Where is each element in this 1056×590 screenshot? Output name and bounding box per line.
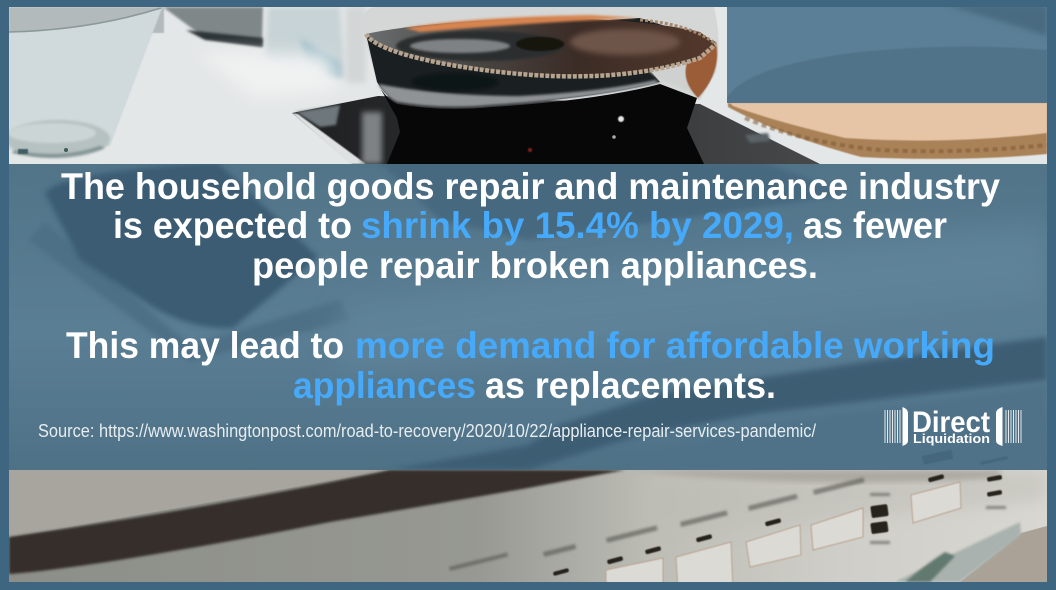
heading: demand implication: [66, 325, 995, 406]
blurred tablet shadow: [377, 160, 850, 240]
dishwasher blurred labels: [449, 477, 1006, 571]
cork coaster: [728, 103, 1047, 159]
clear glass top: [361, 7, 719, 100]
background dark object: [163, 7, 263, 47]
heading: shrink statistic: [61, 166, 1000, 286]
heading: shrink statistic: as fewer: [803, 205, 947, 246]
light glass wedge: [648, 70, 660, 82]
heading: demand implication: This may lead to: [66, 325, 344, 366]
photo: dishwasher control panel: [9, 470, 1047, 590]
metal trim: [960, 526, 1047, 582]
left drinking glass: [6, 7, 164, 158]
carafe: [361, 7, 719, 164]
heading: shrink statistic: is expected to: [113, 205, 352, 246]
tablet: [292, 96, 820, 164]
heading: demand implication: appliances: [293, 365, 476, 406]
photo: coffee carafe on tablet: [6, 7, 1047, 164]
heading: shrink statistic: people repair broken appliances.: [252, 245, 818, 286]
light band of glass: [378, 80, 660, 107]
heading: shrink statistic: shrink by 15.4% by 2029,: [361, 205, 794, 246]
brown side: [686, 42, 717, 98]
dark liquid under froth: [366, 18, 716, 107]
dishwasher indicator lights: [553, 474, 1002, 576]
source citation: Source: https://www.washingtonpost.com/road-to-recovery/2020/10/22/appliance-repair-services-pandemic/: [38, 421, 816, 441]
dark stripe: [9, 470, 625, 574]
heading: shrink statistic: The household goods repair and maintenance industry: [61, 166, 1000, 207]
heading: demand implication: more demand for affordable working: [355, 325, 995, 366]
upper-right translucent blue panel: [727, 5, 1047, 103]
black base: [378, 84, 704, 164]
blurred phone shadow: [34, 230, 342, 360]
dishwasher buttons: [606, 482, 961, 590]
logo: Direct Liquidation: Liquidation: [913, 432, 990, 446]
heading: demand implication: as replacements.: [485, 365, 776, 406]
back glass: [265, 7, 345, 78]
froth ring: [366, 34, 716, 76]
logo: Direct Liquidation: Direct: [912, 406, 990, 439]
logo: Direct Liquidation: [885, 406, 1021, 446]
faint start labels: [922, 450, 1008, 465]
translucent blue text panel: [9, 160, 1047, 470]
blurred stripe shadow: [390, 337, 1047, 470]
coffee surface: [366, 18, 716, 76]
table surface: [9, 7, 1047, 164]
